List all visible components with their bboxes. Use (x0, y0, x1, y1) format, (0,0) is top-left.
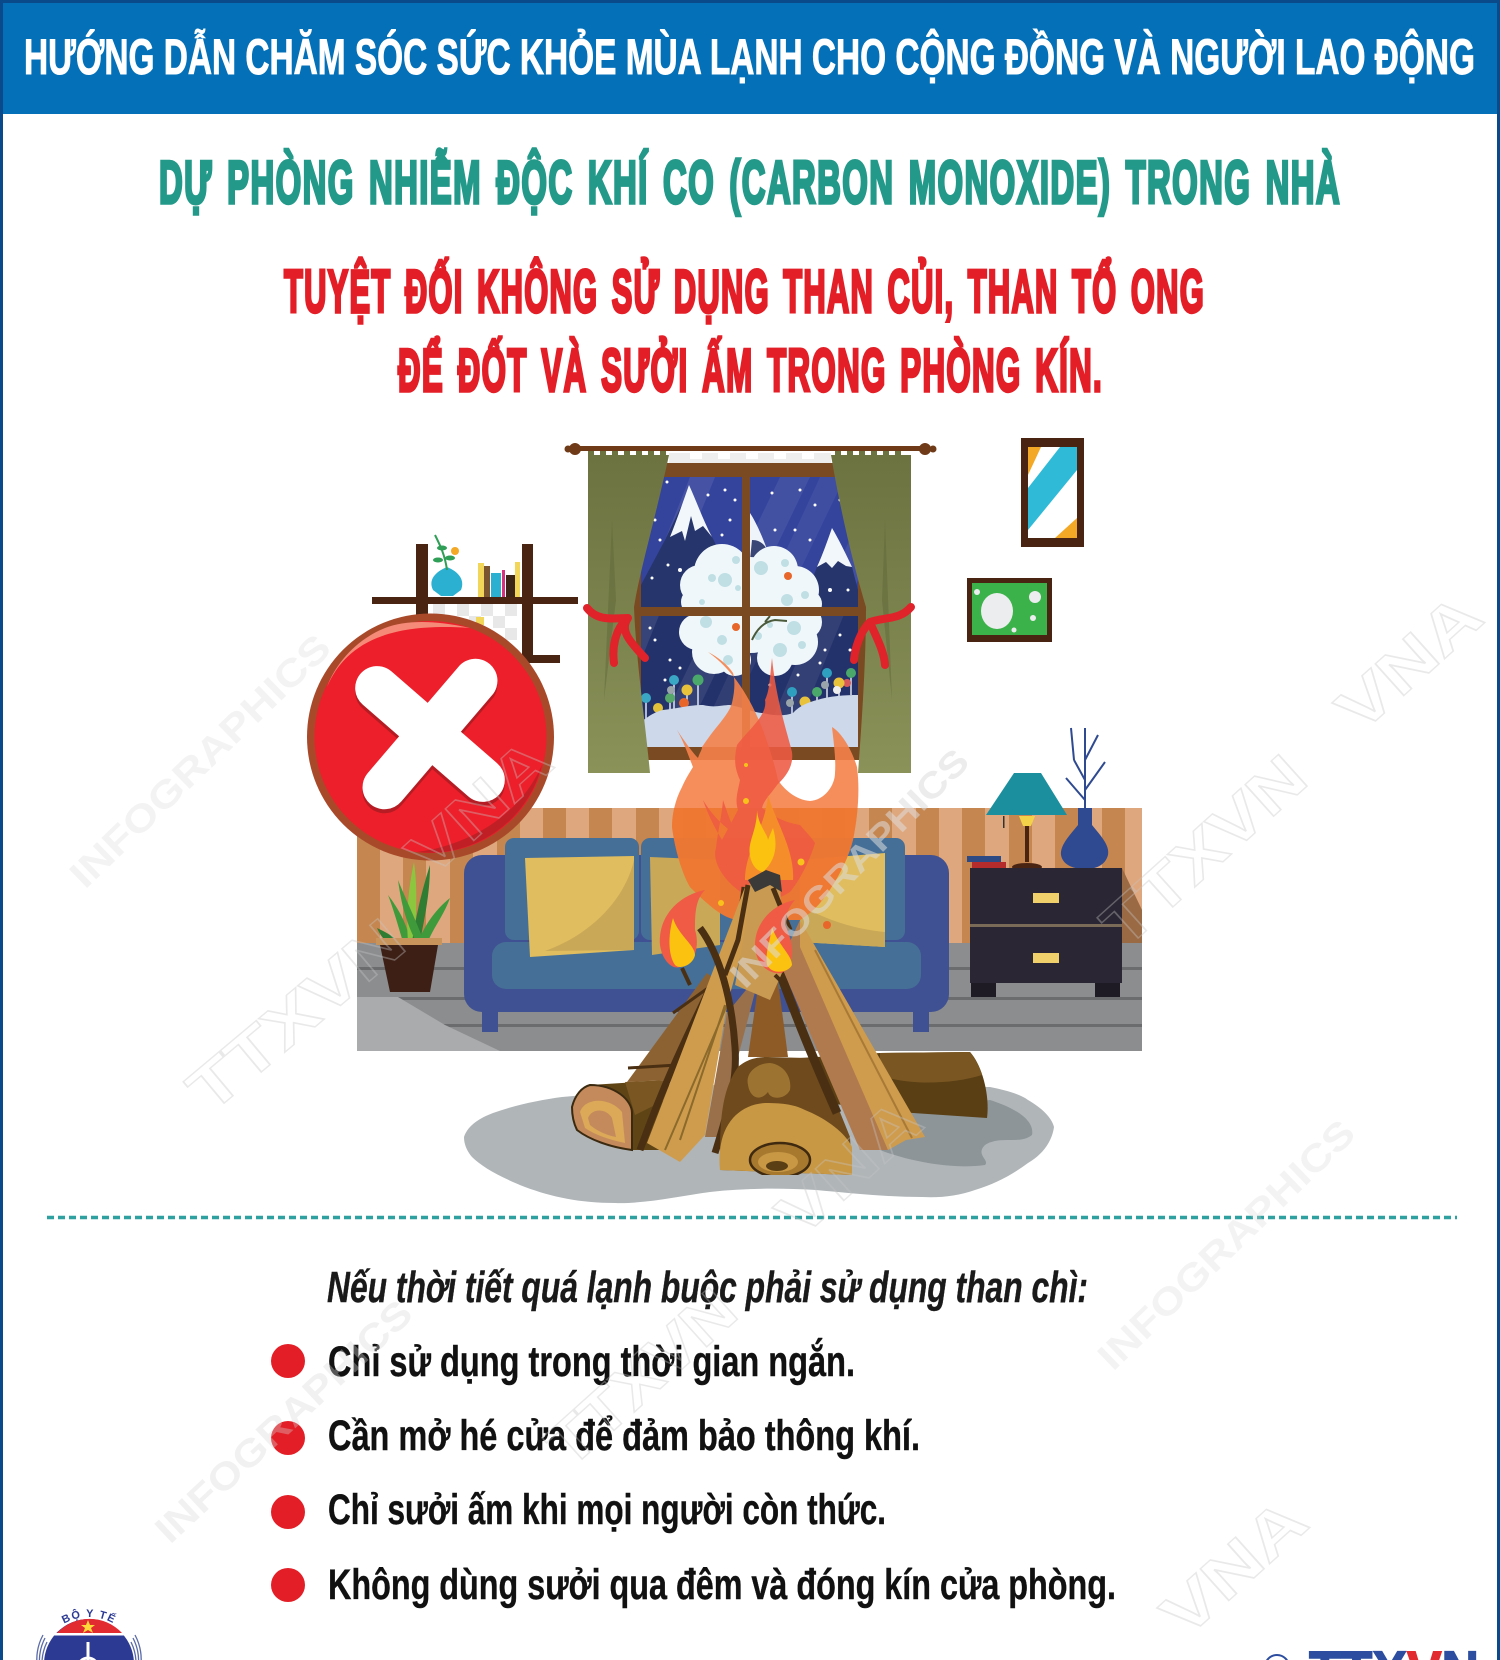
illustration: room with indoor fire (307, 438, 1142, 1203)
white X mark (346, 650, 514, 822)
picture frame: stripes (1021, 438, 1084, 547)
watermarks: TTXVN (1088, 742, 1320, 960)
advice lead-in: Nếu thời tiết quá lạnh buộc phải sử dụng than chì: (327, 1263, 1088, 1312)
dotted divider (47, 1216, 1457, 1219)
sofa cushions (525, 853, 885, 957)
right curtain (831, 455, 911, 773)
left curtain (588, 455, 669, 773)
wood sticks (627, 887, 788, 1162)
watermarks: INFOGRAPHICS (1090, 1112, 1364, 1378)
plant (376, 862, 450, 992)
front log (719, 1057, 852, 1177)
shelf books (478, 562, 520, 597)
side flames (660, 890, 795, 985)
watermarks (62, 580, 1496, 1650)
curtain rod (564, 443, 936, 463)
watermarks: INFOGRAPHICS (147, 1292, 421, 1552)
header banner (0, 0, 1500, 114)
watermarks: TTXVN (533, 1275, 750, 1480)
nightstand (967, 856, 1142, 997)
left log (572, 1080, 670, 1150)
rear log (800, 1052, 988, 1118)
ground shadow (464, 1085, 1054, 1203)
item 3 (271, 1486, 886, 1534)
wall and floor (357, 808, 1142, 1051)
watermarks: VNA (763, 1085, 936, 1250)
logo: Bộ Y Tế: BỘ Y TẾ (61, 1608, 117, 1624)
advice list (271, 1337, 1116, 1609)
window (633, 463, 866, 760)
watermarks: INFOGRAPHICS (722, 740, 977, 996)
item 1: Chỉ sử dụng trong thời gian ngắn. (328, 1337, 855, 1386)
no symbol: red circle with white X (307, 614, 554, 860)
lamp (986, 773, 1067, 871)
picture frame: green (967, 578, 1052, 642)
right plank and branch (725, 870, 925, 1150)
watermarks: VNA (1323, 580, 1496, 745)
item 4: Không dùng sưởi qua đêm và đóng kín cửa phòng. (328, 1561, 1116, 1609)
vase with branches (1061, 728, 1108, 869)
curtain ties (587, 607, 911, 665)
wall shelf (372, 535, 578, 663)
item 1 (271, 1337, 855, 1386)
item 2: Cần mở hé cửa để đảm bảo thông khí. (328, 1412, 920, 1460)
logo: Bộ Y Tế (36, 1608, 142, 1660)
watermarks: VNA (1148, 1485, 1321, 1650)
watermarks: TTXVN (175, 906, 418, 1126)
watermarks: VNA (393, 725, 566, 890)
sofa (464, 838, 949, 1032)
flames (672, 652, 858, 920)
item 3: Chỉ sưởi ấm khi mọi người còn thức. (328, 1486, 886, 1534)
watermarks: INFOGRAPHICS (62, 627, 339, 896)
shelf vase and sprig (431, 535, 462, 596)
warning headline (284, 258, 1205, 404)
